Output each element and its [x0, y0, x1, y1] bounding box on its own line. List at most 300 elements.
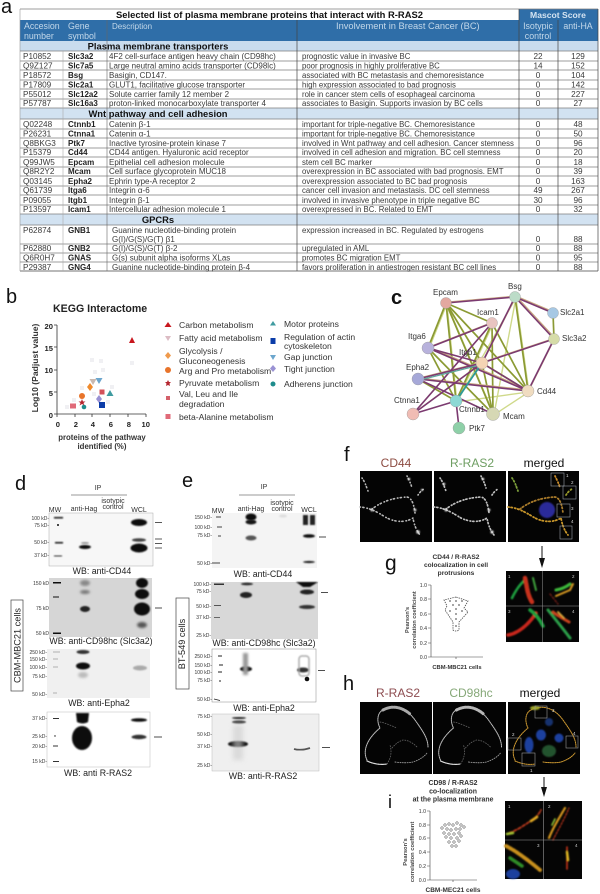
network labels: Epcam: [433, 288, 458, 297]
section band: GPCRs: [20, 214, 598, 225]
legend: cytoskeleton: [284, 341, 332, 351]
row: Slc16a3: P57787: [23, 99, 52, 108]
IP lane headers: control: [271, 506, 293, 513]
row: GNG4: favors proliferation in antiestrogen resistant BC cell lines: [302, 263, 496, 272]
panel a: protein table: [20, 9, 598, 272]
row: Itga6: cancer cell invasion and metastasis. DC cell stemness: [302, 186, 490, 195]
axis tick labels: 8: [127, 420, 131, 429]
legend: Tight junction: [284, 364, 335, 374]
legend: degradation: [179, 399, 225, 409]
cell line label box: CBM-MBC21: CBM-MBC21 cells: [12, 608, 22, 683]
axis tick labels: 20: [45, 322, 53, 331]
network labels: Ptk7: [469, 424, 486, 433]
row: GNB2: 88: [573, 244, 583, 253]
row: Slc2a1: 142: [571, 80, 585, 90]
y axis label: Pearson's: [403, 838, 409, 866]
blot: anti-R-RAS2: 25 kD-: [32, 734, 47, 740]
row: Cd44: 20: [573, 148, 583, 157]
row: Ctnna1: important for triple-negative BC. Chemoresistance: [302, 129, 475, 138]
blot: anti-R-RAS2: 37 kD-: [32, 716, 47, 722]
micrograph: merged with nucleus and boxes: 2: [571, 480, 574, 485]
tick labels: 0.0: [419, 878, 426, 884]
row: Bsg: P18572: [23, 71, 52, 80]
zoomed inset micrographs: 1: [508, 574, 511, 579]
arrow down to inset: [539, 546, 545, 568]
row: GNB1: expression increased in BC. Regulated by estrogens: [302, 226, 484, 235]
blot: anti-CD98hc: 75 kD: [36, 606, 49, 612]
tick labels: 0.8: [419, 823, 426, 829]
row: Slc2a1: P17809: [23, 80, 52, 90]
blot: anti-CD44: 75 kD-: [34, 523, 49, 529]
blot: anti-CD44: 150 kD-: [194, 515, 212, 521]
axis tick labels: 4: [91, 420, 96, 429]
row: Slc2a1: 0: [536, 80, 541, 90]
section band: Wnt pathway: [20, 108, 598, 119]
IP lane headers: anti-Hag: [238, 506, 264, 513]
zoomed inset micrographs: 2: [548, 804, 551, 809]
axis tick labels: 0: [56, 420, 60, 429]
table title bar: Selected list of plasma membrane proteins that interact with R-RAS2: [116, 10, 423, 21]
row: GNAS: G(s) subunit alpha isoforms XLas: [112, 253, 230, 262]
blot: anti-CD44: 100 kD-: [194, 525, 212, 531]
panel label e: e: [182, 470, 193, 492]
plot title: protrusions: [438, 570, 475, 577]
row: GNG4: P29387: [23, 263, 52, 272]
row: Ctnna1: [23, 129, 583, 138]
network edges: [413, 296, 555, 428]
blot: anti-R-RAS2: WB: anti-R-RAS2: [229, 771, 297, 781]
row: Slc16a3: 0: [536, 99, 541, 108]
panel label c: c: [391, 287, 402, 309]
row: Itga6: Integrin α-6: [109, 186, 150, 195]
row: Bsg: Bsg: [68, 71, 83, 80]
row: Slc3a2: 4F2 cell-surface antigen heavy chain (CD98hc): [109, 52, 276, 61]
blot: anti-Epha2: 50 kD-: [197, 697, 212, 703]
row: Cd44: P15379: [23, 148, 52, 157]
plot title: co-localization: [429, 788, 477, 796]
micrograph: merged with nucleus and boxes: 4: [571, 519, 574, 524]
legend: Gap junction: [284, 352, 332, 362]
network labels: Icam1: [477, 308, 499, 317]
row: GNAS: 95: [573, 253, 583, 262]
row: Ctnnb1: [23, 120, 583, 129]
row: Ctnnb1: Q02248: [23, 120, 53, 129]
row: GNB1: 88: [573, 235, 583, 244]
row: Bsg: Basigin, CD147.: [109, 71, 167, 80]
zoomed inset micrographs: 3: [537, 843, 540, 848]
IP lane headers: [49, 485, 147, 514]
axis tick labels: 10: [142, 420, 150, 429]
blot: anti-R-RAS2: [197, 714, 330, 781]
axis tick labels: 15: [45, 344, 54, 353]
IP lane headers: control: [102, 504, 124, 511]
axis tick labels: 10: [45, 366, 53, 375]
row: GNB2: P62880: [23, 244, 52, 253]
row: Ptk7: 0: [536, 139, 541, 148]
legend: Adherens junction: [284, 379, 353, 389]
blot: anti-CD98hc: WB: anti-CD98hc (Slc3a2): [49, 636, 153, 646]
micrograph: merged with nucleus and boxes: 1: [566, 473, 569, 478]
row: GNB1: GNB1: [68, 226, 91, 235]
channel titles: [376, 686, 560, 700]
micrograph: R-RAS2: [434, 471, 506, 542]
blot: anti-CD98hc: WB: anti-CD98hc (Slc3a2): [212, 638, 316, 648]
row: Ptk7: 96: [573, 139, 583, 148]
IP lane headers: WCL: [131, 507, 147, 514]
network labels: Mcam: [503, 412, 525, 421]
micrograph: merged with nuclei and boxes: 2: [512, 732, 515, 737]
tick labels: [419, 809, 426, 884]
tick labels: 0.6: [419, 836, 426, 842]
micrograph: CD98hc: [433, 702, 506, 774]
row: Slc2a1: [23, 80, 585, 90]
table column headers: symbol: [68, 31, 96, 41]
row: Mcam: [23, 167, 583, 176]
row: Bsg: associated with BC metastasis and chemoresistance: [302, 71, 484, 80]
x axis caption: CBM-MEC21 cells: [426, 887, 481, 894]
section band: GPCRs: GPCRs: [142, 214, 174, 225]
tick labels: 0.4: [420, 626, 427, 632]
y axis label: correlation coefficient: [412, 591, 418, 649]
row: Itga6: Itga6: [68, 186, 87, 195]
row: Itgb1: Integrin β-1: [109, 196, 150, 205]
row: Slc7a5: Slc7a5: [68, 62, 94, 70]
panel label g: g: [385, 552, 397, 575]
blot: anti-CD98hc: 50 kD-: [196, 604, 211, 610]
network labels: [394, 282, 587, 433]
tick labels: 0.2: [420, 641, 427, 647]
violin: [444, 597, 468, 631]
legend: Fatty acid metabolism: [179, 333, 263, 343]
row: GNB2: G(I)/G(S)/G(T) β-2: [112, 244, 178, 253]
blot: anti-CD98hc: [193, 582, 328, 648]
table column headers: Involvement in Breast Cancer (BC): [336, 21, 480, 31]
row: Itgb1: Itgb1: [68, 196, 88, 205]
table column headers: Description: [112, 22, 152, 31]
panel label h: h: [343, 673, 354, 695]
row: GNG4: GNG4: [68, 263, 91, 272]
table column headers: Isotypic: [523, 21, 554, 31]
panel h: R-RAS2 and CD98hc microscopy: [360, 686, 582, 879]
micrograph: merged with nuclei and boxes: 3: [552, 708, 555, 713]
blot: anti-Epha2: 250 kD-: [29, 650, 47, 656]
network labels: Bsg: [508, 282, 522, 291]
micrograph: merged with nuclei and boxes: 1: [530, 768, 533, 773]
channel titles: merged: [520, 686, 560, 700]
row: Itga6: 49: [533, 186, 543, 195]
panel g: colocalization violin plot: [405, 554, 488, 671]
row: Slc2a1: Slc2a1: [68, 80, 94, 90]
x axis label: identified (%): [78, 442, 127, 451]
row: Slc7a5: 152: [571, 62, 585, 70]
row: Epcam: [23, 158, 583, 167]
legend: Gluconeogenesis: [179, 356, 245, 366]
row: Slc2a1: high expression associated to bad prognosis: [302, 80, 456, 90]
blot: anti-CD98hc: 37 kD-: [196, 615, 211, 621]
row: Mcam: Cell surface glycoprotein MUC18: [109, 167, 226, 176]
row: Slc7a5: Q9Z127: [23, 62, 53, 70]
micrograph: merged with nucleus and boxes: [508, 471, 579, 542]
micrograph: R-RAS2: [360, 702, 432, 774]
blot: anti-CD98hc: [33, 578, 162, 646]
row: Bsg: [23, 71, 585, 80]
blot: anti-Epha2: 75 kD-: [197, 678, 212, 684]
legend: Carbon metabolism: [179, 320, 254, 330]
network labels: Itga6: [408, 332, 426, 341]
row: GNG4: [23, 263, 583, 272]
row: Itgb1: 96: [573, 196, 583, 205]
row: Slc12a2: [23, 90, 585, 99]
IP lane headers: MW: [49, 507, 62, 514]
row: GNB2: 0: [536, 244, 541, 253]
axis tick labels: 6: [109, 420, 113, 429]
row: Mcam: 39: [573, 167, 583, 176]
row: Ctnnb1: 48: [573, 120, 583, 129]
table title bar: [20, 9, 598, 21]
zoomed inset micrographs: 2: [572, 574, 575, 579]
row: Bsg: 0: [536, 71, 541, 80]
network labels: Cd44: [537, 387, 557, 396]
row: Ctnnb1: 0: [536, 120, 541, 129]
table column headers: number: [24, 31, 54, 41]
zoomed inset micrographs: [506, 571, 579, 642]
row: GNB2: GNB2: [68, 244, 91, 253]
tick labels: 0.8: [420, 597, 427, 603]
y axis label: Pearson's: [405, 607, 411, 633]
blot: anti-Epha2: [29, 649, 150, 708]
legend: Arg and Pro metabolism: [179, 366, 271, 376]
axis tick labels: 2: [74, 420, 78, 429]
row: Itga6: 267: [571, 186, 585, 195]
row: Ptk7: Q8BKG3: [23, 139, 56, 148]
micrograph: CD44: [360, 471, 432, 542]
blot: anti-Epha2: WB: anti-Epha2: [233, 703, 295, 713]
row: Ptk7: involved in Wnt pathway and cell adhesion. Cancer stemness: [302, 139, 514, 148]
row: Slc16a3: Slc16a3: [68, 99, 98, 108]
row: Slc7a5: [23, 62, 585, 70]
section band: plasma membrane transporters: Plasma membrane transporters: [88, 40, 228, 52]
panel b: KEGG interactome chart: [30, 303, 355, 451]
tick labels: 1.0: [419, 809, 426, 815]
row: GNB1: 0: [536, 235, 541, 244]
row: Epcam: 18: [573, 158, 583, 167]
network labels: Epha2: [406, 363, 430, 372]
blot: anti-CD98hc: 50 kD: [36, 631, 49, 637]
tick labels: 0.4: [419, 850, 426, 856]
blot: anti-CD44: 100 kD-: [31, 516, 49, 522]
table column headers: [20, 20, 598, 41]
network nodes: [407, 292, 560, 434]
row: Slc3a2: [23, 52, 585, 61]
blot: anti-Epha2: 100 kD-: [194, 670, 212, 676]
blot: anti-R-RAS2: 25 kD-: [197, 763, 212, 769]
row: Itgb1: P09055: [23, 196, 52, 205]
row: Slc16a3: associates to Basigin. Supports invasion by BC cells: [302, 99, 483, 108]
legend: Glycolysis /: [179, 346, 223, 356]
row: GNAS: 0: [536, 253, 541, 262]
row: Epcam: Epcam: [68, 158, 94, 167]
row: Ptk7: [23, 139, 583, 148]
blot: anti-Epha2: 150 kD-: [29, 657, 47, 663]
row: Icam1: P13597: [23, 205, 52, 214]
legend: Regulation of actin: [284, 332, 355, 342]
axes: [428, 585, 483, 659]
table column headers: Gene: [68, 21, 90, 31]
IP lane headers: anti-Hag: [71, 506, 97, 513]
blot: anti-CD44: [31, 513, 162, 576]
row: Epcam: 0: [536, 158, 541, 167]
row: Cd44: 0: [536, 148, 541, 157]
row: Icam1: 0: [536, 205, 541, 214]
row: Epha2: Ephrin type-A receptor 2: [109, 177, 196, 186]
row: GNB1: G(I)/G(S)/G(T) β1: [112, 235, 175, 244]
zoomed inset micrographs: 1: [508, 804, 511, 809]
blot: anti-Epha2: 150 kD-: [194, 663, 212, 669]
row: Epha2: 0: [536, 177, 541, 186]
row: Epha2: [23, 177, 585, 186]
row: GNAS: promotes BC migration EMT: [302, 253, 401, 262]
IP lane headers: MW: [212, 508, 225, 515]
row: Slc7a5: Large neutral amino acids transporter (CD98lc): [109, 62, 276, 70]
axis tick labels: [45, 322, 150, 429]
section band: Wnt pathway: Wnt pathway and cell adhesion: [88, 108, 228, 119]
row: Slc12a2: P55012: [23, 90, 52, 99]
row: Ctnnb1: Catenin β-1: [109, 120, 151, 129]
micrograph: merged with nuclei and boxes: [508, 702, 580, 774]
blot: anti-Epha2: 75 kD-: [32, 674, 47, 680]
row: Icam1: overexpressed in BC. Related to EMT: [302, 205, 433, 214]
row: Icam1: [23, 205, 583, 214]
row: Itgb1: involved in invasive phenotype in triple negative BC: [302, 196, 480, 205]
row: Slc3a2: 22: [533, 52, 543, 61]
micrograph: merged with nucleus and boxes: 3: [571, 506, 574, 511]
channel titles: R-RAS2: [450, 456, 494, 470]
panel label b: b: [6, 286, 17, 308]
row: Icam1: Icam1: [68, 205, 91, 214]
row: Epha2: Q03145: [23, 177, 53, 186]
y axis label: correlation coefficient: [410, 822, 416, 882]
row: GNB2: [23, 244, 583, 253]
row: Epcam: stem cell BC marker: [302, 158, 373, 167]
IP lane headers: IP: [95, 485, 102, 492]
plot title: at the plasma membrane: [413, 796, 494, 804]
IP lane headers: WCL: [301, 507, 317, 514]
blot: anti-R-RAS2: 75 kD-: [197, 714, 212, 720]
chart axes: [54, 325, 146, 417]
row: Itga6: [23, 186, 585, 195]
IP lane headers: [212, 484, 317, 515]
row: GNG4: Guanine nucleotide-binding protein β-4: [112, 263, 251, 272]
blot: anti-Epha2: [194, 649, 325, 713]
IP lane headers: isotypic: [270, 500, 294, 507]
legend: [164, 319, 355, 422]
blot: anti-R-RAS2: 20 kD-: [32, 744, 47, 750]
blot: anti-CD98hc: 75 kD-: [196, 589, 211, 595]
row: Ctnna1: 0: [536, 129, 541, 138]
blot: anti-CD44: [194, 513, 326, 579]
network labels: Itgb1: [459, 348, 477, 357]
blot: anti-CD44: WB: anti-CD44: [234, 569, 292, 579]
row: Ctnna1: Ctnna1: [68, 129, 96, 138]
row: GNB1: [23, 226, 583, 244]
blot: anti-Epha2: 50 kD-: [32, 692, 47, 698]
row: Slc12a2: Slc12a2: [68, 90, 98, 99]
row: GNG4: 0: [536, 263, 541, 272]
zoomed inset micrographs: 4: [575, 843, 578, 848]
network labels: Slc2a1: [560, 308, 585, 317]
row: Ctnnb1: Ctnnb1: [68, 120, 96, 129]
axis tick labels: 0: [49, 411, 53, 420]
row: Epha2: Epha2: [68, 177, 93, 186]
zoomed inset micrographs: [505, 801, 582, 879]
plot title: colocalization in cell: [424, 562, 488, 569]
blot: anti-CD44: 50 kD-: [34, 540, 49, 546]
row: Ctnna1: Catenin α-1: [109, 129, 151, 138]
row: GNB1: P62874: [23, 226, 52, 235]
row: Ptk7: Ptk7: [68, 139, 85, 148]
axes: [427, 811, 477, 882]
cell line label box: BT-549: BT-549 cells: [177, 618, 187, 669]
blot: anti-CD98hc: 150 kD: [33, 581, 49, 587]
IP lane headers: isotypic: [101, 498, 125, 505]
row: Epha2: overexpression associated to BC bad prognosis: [302, 177, 467, 186]
row: Cd44: involved in cell adhesion and migration. BC cell stemness: [302, 148, 501, 157]
cell line label box: CBM-MBC21: [11, 600, 23, 691]
channel titles: R-RAS2: [376, 686, 420, 700]
blot: anti-R-RAS2: [32, 712, 162, 778]
table column headers: control: [525, 31, 551, 41]
row: Epha2: 163: [571, 177, 585, 186]
legend: Val, Leu and Ile: [179, 389, 238, 399]
tick labels: [420, 583, 427, 661]
blot: anti-R-RAS2: 50 kD-: [197, 732, 212, 738]
scatter cloud: [441, 822, 465, 847]
legend: beta-Alanine metabolism: [179, 412, 274, 422]
tick labels: 0.2: [419, 864, 426, 870]
row: GNB1: Guanine nucleotide-binding protein: [112, 226, 236, 235]
blot: anti-Epha2: WB: anti-Epha2: [68, 698, 130, 708]
panel label i: i: [388, 792, 392, 812]
zoomed inset micrographs: 3: [508, 609, 511, 614]
row: Ctnna1: P26231: [23, 129, 52, 138]
blot: anti-Epha2: 100 kD-: [29, 665, 47, 671]
blot: anti-CD44: 75 kD-: [197, 533, 212, 539]
arrow down to inset: [541, 777, 547, 797]
row: Slc3a2: Slc3a2: [68, 52, 94, 61]
cell line label box: BT-549: [176, 598, 189, 689]
blot: anti-CD98hc: 100 kD-: [193, 582, 211, 588]
row: GNAS: [23, 253, 583, 262]
section band: plasma membrane transporters: [20, 40, 598, 52]
row: Mcam: Q8R2Y2: [23, 167, 55, 176]
row: Itgb1: [23, 196, 583, 205]
zoomed inset micrographs: 4: [572, 609, 575, 614]
network labels: Ctnnb1: [459, 405, 485, 414]
plot title: CD44 / R-RAS2: [433, 554, 479, 561]
row: Mcam: 0: [536, 167, 541, 176]
legend: Pyruvate metabolism: [179, 378, 259, 388]
table column headers: Accesion: [24, 21, 60, 31]
network labels: Ctnna1: [394, 396, 420, 405]
row: GNB2: upregulated in AML: [302, 244, 370, 253]
row: Icam1: Intercellular adhesion molecule 1: [109, 205, 227, 214]
row: Slc16a3: [23, 99, 583, 108]
micrograph: merged with nuclei and boxes: 4: [573, 731, 576, 736]
blot: anti-CD98hc: 25 kD-: [196, 633, 211, 639]
row: GNAS: GNAS: [68, 253, 92, 262]
row: Itga6: Q61739: [23, 186, 53, 195]
blot: anti-CD44: WB: anti-CD44: [73, 566, 131, 576]
